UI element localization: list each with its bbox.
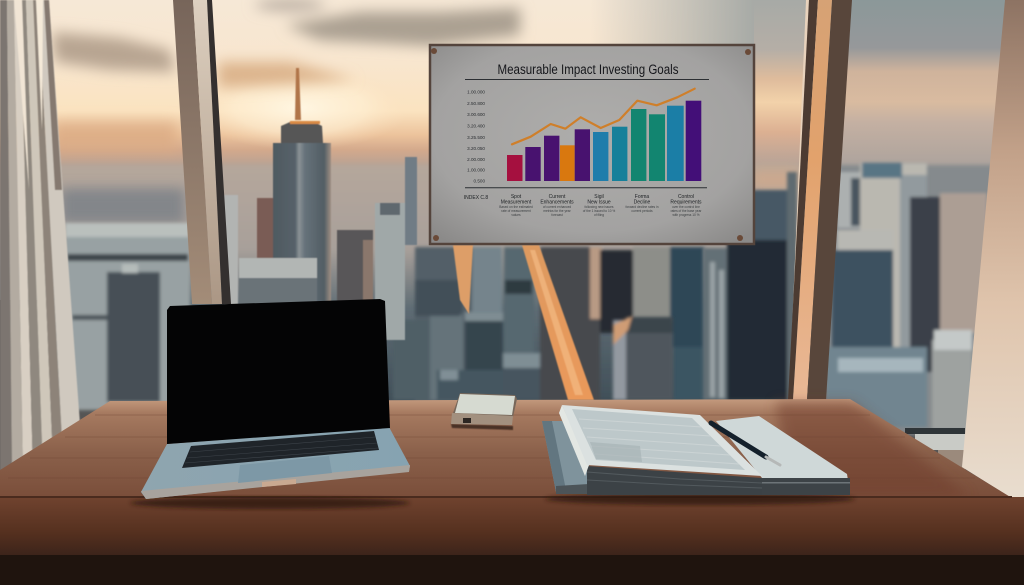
pen (711, 423, 780, 465)
category labels: Sigil (594, 194, 604, 200)
building by road (613, 320, 673, 400)
chart title: Measurable Impact Investing Goals (498, 62, 679, 77)
corner screws (431, 48, 751, 241)
mid-distance blocks (393, 247, 705, 407)
laptop (141, 299, 410, 499)
category labels: INDEX C.8 (464, 195, 488, 201)
curtain left (0, 0, 80, 472)
category labels: of the 1 issued to 10 % (583, 209, 615, 213)
desk (0, 399, 1024, 585)
category labels: Based on the estimated (499, 205, 533, 209)
bar chart (507, 101, 701, 181)
category labels: Decline (634, 200, 651, 206)
category labels: forward decline rates in (626, 205, 659, 209)
chart panel: Measurable Impact Investing Goals (430, 45, 754, 244)
sky (0, 0, 1024, 300)
y axis labels: 0.500 (474, 178, 485, 184)
window pillar left (173, 0, 231, 304)
left buildings (65, 223, 190, 410)
central tower with spire (224, 68, 417, 340)
y axis labels: 2.00.000 (467, 157, 485, 162)
right wall (962, 0, 1024, 506)
category labels: Spot (511, 194, 522, 200)
category labels: forecast (551, 213, 563, 217)
y axis labels: 3.20.050 (467, 146, 485, 151)
trackpad (238, 456, 332, 483)
category labels: values (511, 213, 521, 217)
city skyline (50, 68, 1010, 435)
category labels: of current enhanced (543, 205, 571, 209)
window pillar right (788, 0, 852, 400)
category labels: with progress 10 % (672, 213, 700, 217)
right document (716, 416, 850, 494)
y axis labels (467, 90, 485, 184)
category labels: New Issue (587, 200, 611, 206)
y axis labels: 3.00.600 (467, 112, 485, 117)
category labels: rates of the base year (671, 209, 702, 213)
laptop screen (167, 299, 390, 444)
y axis labels: 1.00.000 (467, 90, 485, 94)
keyboard (182, 431, 379, 468)
main document stack (587, 466, 762, 495)
category labels: current periods (631, 209, 653, 213)
category labels: metrics for the year (543, 209, 572, 213)
category labels: Requirements (670, 200, 702, 206)
category labels: over the control line (672, 205, 700, 209)
window sill (905, 428, 965, 470)
binder (542, 421, 589, 492)
right pane buildings (827, 163, 987, 430)
road glow (453, 245, 594, 400)
category labels: rate of measurement (501, 209, 531, 213)
y axis labels: 3.20.400 (467, 124, 485, 128)
y axis labels: 1.00.000 (467, 168, 485, 172)
laptop base (141, 427, 410, 499)
main document page (562, 405, 762, 476)
y axis labels: 3.25.500 (467, 135, 485, 140)
category labels: of filing (594, 213, 604, 217)
category labels: Measurement (501, 200, 532, 206)
category labels: Current (549, 194, 566, 200)
category labels: Control (678, 194, 694, 200)
category labels: Enhancements (540, 200, 574, 206)
trend line (512, 89, 695, 144)
stack of documents and pen (542, 405, 850, 495)
category labels (464, 194, 702, 217)
y axis labels: 2.50.800 (467, 101, 485, 106)
near right tower (727, 240, 787, 400)
phone on desk (451, 393, 517, 430)
category labels: Forma (635, 194, 649, 200)
category labels: following new issues (584, 205, 614, 209)
